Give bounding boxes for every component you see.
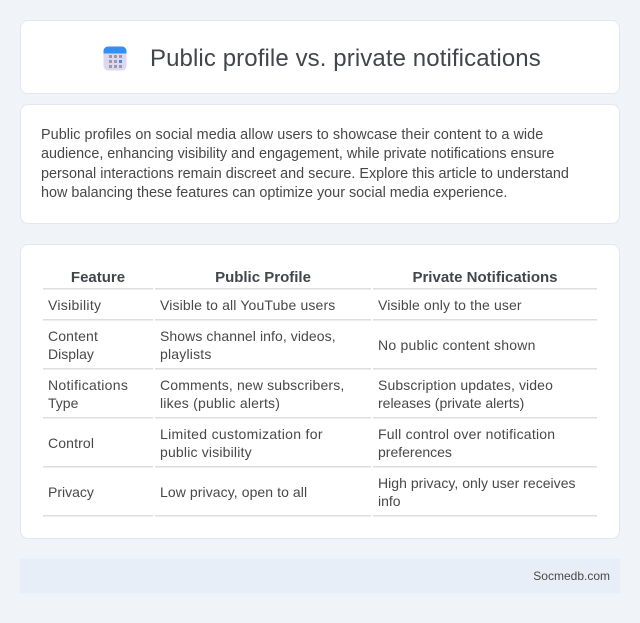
intro text: personal interactions remain discreet and secure. Explore this article to understand	[41, 166, 569, 182]
row: visibility: Visible only to the user	[378, 297, 522, 313]
title card	[20, 20, 620, 94]
row: control: public visibility	[160, 444, 252, 460]
row: privacy: info	[378, 493, 401, 509]
row: content display: Shows channel info, videos,	[160, 328, 336, 344]
row: visibility: Visible to all YouTube users	[160, 297, 335, 313]
row: content display: Display	[48, 346, 94, 362]
icon: calendar	[104, 46, 126, 70]
row: privacy: Privacy	[48, 484, 94, 500]
row: privacy: High privacy, only user receives	[378, 475, 576, 491]
intro text	[41, 127, 569, 201]
row: content display	[48, 328, 536, 362]
row: privacy	[48, 475, 576, 509]
intro card	[20, 104, 620, 224]
table header: Private Notifications	[412, 269, 558, 286]
row: content display: Content	[48, 328, 98, 344]
row: notifications type: releases (private alerts)	[378, 395, 524, 411]
row: visibility	[48, 297, 522, 313]
table card	[20, 244, 620, 539]
intro text: Public profiles on social media allow users to showcase their content to a wide	[41, 127, 543, 143]
row: privacy: Low privacy, open to all	[160, 484, 307, 500]
row: notifications type: likes (public alerts)	[160, 395, 280, 411]
row: notifications type: Notifications	[48, 377, 128, 393]
row: control: Control	[48, 435, 94, 451]
row: visibility: Visibility	[48, 297, 101, 313]
row: control: Full control over notification	[378, 426, 555, 442]
row: notifications type: Comments, new subscribers,	[160, 377, 344, 393]
intro text: audience, enhancing visibility and engagement, while private notifications ensure	[41, 146, 554, 162]
row: notifications type: Type	[48, 395, 78, 411]
table header	[71, 269, 558, 286]
footer bar	[20, 559, 620, 593]
row: notifications type: Subscription updates, video	[378, 377, 553, 393]
row: notifications type	[48, 377, 553, 411]
row: control	[48, 426, 555, 460]
row: content display: No public content shown	[378, 337, 536, 353]
row: control: Limited customization for	[160, 426, 323, 442]
row: content display: playlists	[160, 346, 212, 362]
row: control: preferences	[378, 444, 452, 460]
table header: Feature	[71, 269, 125, 286]
table header: Public Profile	[215, 269, 311, 286]
title: Public profile vs. private notifications	[150, 45, 541, 72]
footer credit: Socmedb.com	[533, 569, 610, 583]
intro text: how balancing these features can optimize your social media experience.	[41, 185, 507, 201]
